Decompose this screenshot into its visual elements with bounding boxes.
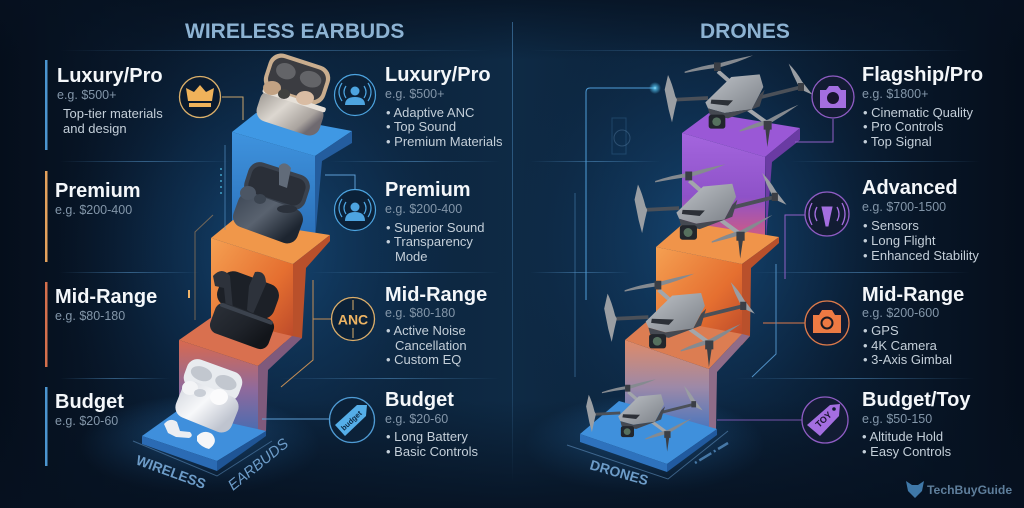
earbuds text: mid-range: • Custom EQ [386,352,461,367]
drone: mid-range [604,274,755,367]
drones text: budget/toy: • Easy Controls [862,444,952,459]
earbuds text: premium: Mode [395,249,428,264]
panel: left earbud labels [55,65,163,428]
icon: toy tag: TOY [814,410,834,429]
left label: luxury/pro: e.g. $500+ [57,88,116,102]
drones text: mid-range: • GPS [863,323,899,338]
earbuds connectors [189,97,355,419]
left tier bars [45,60,48,466]
left label: budget: e.g. $20-60 [55,414,118,428]
drones text: flagship/pro: Flagship/Pro [862,64,983,86]
icon: ANC: ANC [338,312,368,328]
earbuds text: luxury/pro: Luxury/Pro [385,64,491,86]
earbuds text: premium: e.g. $200-400 [385,202,462,216]
earbuds text: mid-range [385,284,487,367]
icon: flagship camera [812,76,854,118]
drones text: flagship/pro: e.g. $1800+ [862,87,928,101]
drones text: advanced: Advanced [862,177,958,199]
drone: flagship [665,55,812,147]
drone: advanced [635,164,786,259]
drones text: advanced: e.g. $700-1500 [862,200,946,214]
left label: mid-range: e.g. $80-180 [55,309,125,323]
label: EARBUDS floor text: EARBUDS [225,435,292,494]
earbuds text: luxury/pro: • Premium Materials [386,134,503,149]
left label: luxury/pro: Top-tier materials [63,106,163,121]
earbuds text: mid-range: • Active Noise [386,323,466,338]
earbuds text: premium: • Transparency [386,234,473,249]
product: luxury earbuds case [254,50,334,138]
left label: premium: e.g. $200-400 [55,203,132,217]
drone: budget/toy [586,379,703,452]
earbuds text: luxury/pro: e.g. $500+ [385,87,444,101]
earbuds text: premium: Premium [385,179,471,201]
drones text: budget/toy [862,389,971,459]
drones text: budget/toy: e.g. $50-150 [862,412,932,426]
title: drones: DRONES [700,20,790,43]
left label: mid-range [55,286,157,323]
icon: advanced sensors [805,192,849,236]
left label: premium [55,180,141,217]
drones text: budget/toy: • Altitude Hold [862,429,943,444]
earbuds text: luxury/pro: • Top Sound [386,119,456,134]
drones text: advanced [862,177,979,263]
drones text: flagship/pro [862,64,983,149]
left label: budget: Budget [55,391,124,413]
product: budget earbuds case [164,356,245,449]
left label: budget [55,391,124,428]
icon: crown [180,76,220,118]
earbuds text: budget: • Long Battery [386,429,468,444]
icon: luxury sound person [334,74,376,116]
drones connectors [575,88,833,420]
drones text: advanced: • Enhanced Stability [863,248,979,263]
earbuds text: budget: • Basic Controls [386,444,478,459]
earbuds text: budget: e.g. $20-60 [385,412,448,426]
icon: mid-range camera [805,301,849,345]
icon: ANC [332,298,374,340]
drones text: mid-range: Mid-Range [862,284,964,306]
label: WIRELESS floor text: WIRELESS [134,452,208,492]
panel: earbuds right labels [385,64,503,459]
drones text: mid-range: • 3-Axis Gimbal [863,352,952,367]
drones text: flagship/pro: • Pro Controls [863,119,944,134]
drones text: flagship/pro: • Cinematic Quality [863,105,974,120]
drones text: mid-range [862,284,964,367]
drones text: budget/toy: Budget/Toy [862,389,971,411]
panel: drones right labels [862,64,983,459]
earbuds staircase [133,113,352,476]
left label: luxury/pro [57,65,163,136]
drones text: advanced: • Sensors [863,218,919,233]
drones text: advanced: • Long Flight [863,233,936,248]
left label: mid-range: Mid-Range [55,286,157,308]
left label: luxury/pro: Luxury/Pro [57,65,163,87]
earbuds text: mid-range: Cancellation [395,338,467,353]
earbuds text: mid-range: Mid-Range [385,284,487,306]
left label: premium: Premium [55,180,141,202]
label: DRONES floor text: DRONES [588,457,650,488]
drones text: flagship/pro: • Top Signal [863,134,932,149]
earbuds text: premium: • Superior Sound [386,220,485,235]
earbuds text: budget: Budget [385,389,454,411]
icon: budget tag: budget [339,408,364,432]
earbuds text: mid-range: e.g. $80-180 [385,306,455,320]
logo: TechBuyGuide: TechBuyGuide [927,483,1012,497]
earbuds text: budget [385,389,478,459]
product: mid-range earbuds case [207,268,282,352]
glow node [649,82,661,94]
earbuds text: luxury/pro: • Adaptive ANC [386,105,474,120]
earbuds text: premium [385,179,485,264]
product: premium earbuds case [230,159,313,247]
icon: toy tag [802,397,848,443]
icon: premium sound person [334,190,376,230]
drones text: mid-range: e.g. $200-600 [862,306,939,320]
earbuds text: luxury/pro [385,64,503,149]
drones text: mid-range: • 4K Camera [863,338,938,353]
left label: luxury/pro: and design [63,121,127,136]
logo: TechBuyGuide [906,481,1012,498]
drones staircase [567,113,800,479]
icon: budget tag [330,398,374,442]
title: wireless earbuds: WIRELESS EARBUDS [185,20,404,43]
